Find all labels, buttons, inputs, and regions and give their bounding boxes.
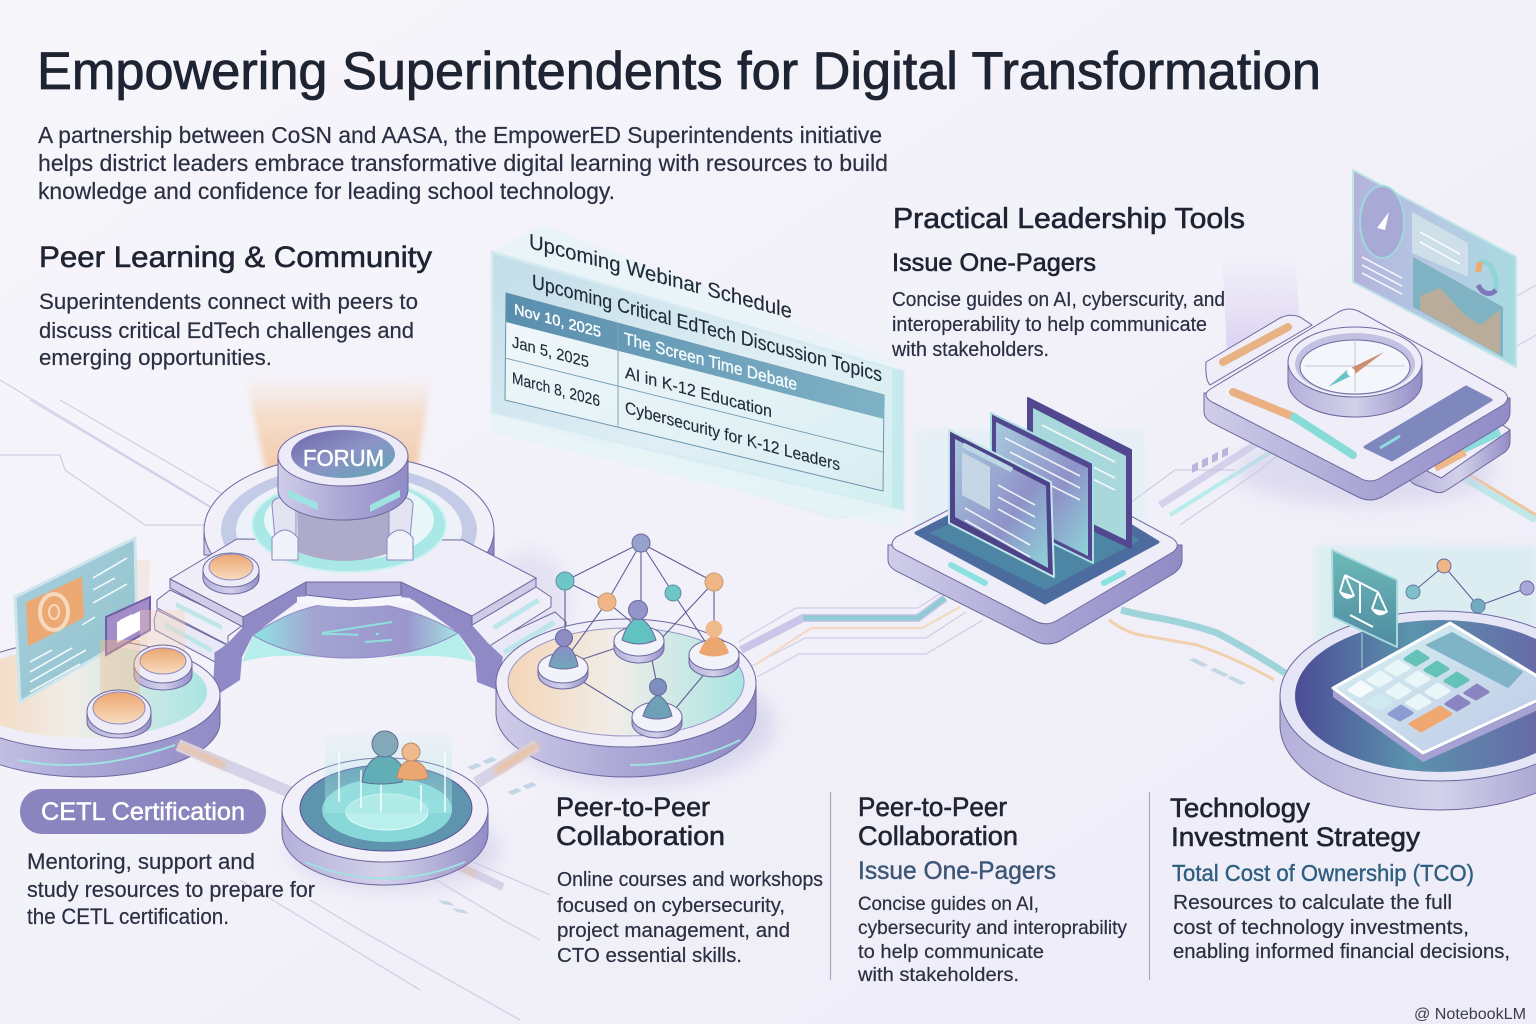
text: CETL description: Mentoring, support and (27, 849, 255, 874)
text: peer learning description: discuss critical EdTech challenges and (39, 318, 414, 343)
row 1 topic: The Screen Time Debate (624, 328, 797, 394)
text: issue one-pagers description: with stakeholders. (891, 339, 1049, 361)
text: peer learning description: Superintendents connect with peers to (39, 289, 418, 314)
heading: Peer-to-Peer (858, 792, 1007, 822)
connector beams (178, 745, 537, 887)
row 3 topic: Cybersecurity for K-12 Leaders (625, 397, 840, 475)
forum label: FORUM (303, 445, 384, 471)
column: peer-to-peer collaboration one-pagers (857, 792, 1127, 986)
text: issue one-pagers description (891, 289, 1225, 361)
text: issue one-pagers description: Concise guides on AI, cyberscurity, and (892, 289, 1225, 311)
illustration: right disc with network (496, 534, 775, 785)
heading: Collaboration (858, 821, 1018, 851)
text: peer learning description (39, 289, 418, 370)
table subheading: Upcoming Critical EdTech Discussion Topics (532, 271, 882, 387)
heading: peer learning and community: Peer Learning & Community (39, 241, 432, 274)
heading: Peer-to-Peer (556, 792, 710, 822)
back tab (1206, 315, 1312, 385)
intro paragraph (38, 122, 888, 204)
body: focused on cybersecurity, (557, 895, 785, 917)
body: enabling informed financial decisions, (1173, 941, 1510, 963)
row 2 date: Jan 5, 2025 (512, 333, 589, 372)
body: CTO essential skills. (557, 945, 742, 967)
row 3 date: March 8, 2026 (512, 369, 600, 411)
person teal (362, 755, 405, 784)
body (857, 893, 1127, 986)
circuit traces and flowing connectors (0, 285, 1536, 1020)
arch (213, 582, 503, 693)
platform steps (154, 587, 566, 668)
person teal head (372, 731, 398, 757)
intro paragraph: helps district leaders embrace transformative digital learning with resources to build (38, 150, 888, 176)
middle tablet (991, 413, 1093, 563)
subheading: Issue One-Pagers (858, 857, 1056, 885)
heading: practical leadership tools: Practical Leadership Tools (893, 203, 1245, 235)
cylinder with label (278, 426, 408, 520)
body: Concise guides on AI, (858, 893, 1039, 915)
pedestal upper (134, 610, 192, 690)
text: issue one-pagers description: interoperability to help communicate (892, 314, 1207, 336)
column: technology investment strategy (1170, 793, 1510, 963)
illustration: forum platform (154, 375, 570, 693)
person pedestal right (689, 620, 739, 677)
body: project management, and (557, 920, 790, 942)
person pedestal centre (614, 600, 664, 663)
title: Empowering Superintendents for Digital Transformation (37, 42, 1321, 101)
platform top (170, 539, 536, 617)
stem (272, 497, 413, 561)
row 1 date: Nov 10, 2025 (514, 301, 601, 341)
badge: CETL certification: CETL Certification (41, 798, 245, 826)
small pedestal (203, 553, 259, 594)
text: CETL description (27, 849, 315, 929)
document card (15, 538, 137, 702)
front tab (1409, 420, 1510, 493)
subheading: Total Cost of Ownership (TCO) (1172, 860, 1474, 886)
network nodes (556, 534, 723, 611)
body: Resources to calculate the full (1173, 892, 1452, 914)
badge: CETL certification (20, 789, 266, 834)
compass dial (1288, 327, 1422, 417)
person orange (397, 760, 428, 780)
divider (1148, 792, 1150, 980)
row 2 topic: AI in K-12 Education (625, 362, 772, 421)
intro paragraph: A partnership between CoSN and AASA, the EmpowerED Superintendents initiative (38, 122, 882, 148)
body: cost of technology investments, (1173, 917, 1469, 939)
illustration: compass device (1204, 170, 1516, 505)
column: peer-to-peer collaboration courses (556, 792, 823, 967)
keys (1349, 651, 1488, 731)
panel: webinar schedule (492, 225, 903, 530)
intro paragraph: knowledge and confidence for leading school technology. (38, 178, 615, 204)
front tablet (949, 430, 1054, 577)
network links (565, 543, 714, 717)
network chart (1406, 559, 1534, 613)
label strip (1365, 387, 1491, 460)
calculator body (1333, 623, 1536, 762)
hub under the arch (242, 602, 475, 662)
body: with stakeholders. (857, 964, 1019, 986)
folder card (106, 597, 150, 655)
body: to help communicate (858, 941, 1044, 963)
illustration: calculator device (1280, 545, 1536, 810)
body (557, 869, 823, 967)
heading: Technology (1170, 793, 1310, 823)
table (505, 293, 884, 491)
scales card (1332, 550, 1397, 668)
person orange head (402, 743, 420, 761)
divider (830, 792, 832, 980)
heading (858, 792, 1018, 851)
illustration: left disc with document card (0, 538, 220, 777)
heading: Investment Strategy (1171, 822, 1421, 852)
body: Online courses and workshops (557, 869, 823, 891)
text: CETL description: study resources to prepare for (27, 877, 315, 902)
base plate (1204, 393, 1510, 500)
heading (556, 792, 725, 851)
pedestal lower (87, 640, 151, 738)
heading: Collaboration (556, 821, 725, 851)
text: peer learning description: emerging opportunities. (39, 345, 272, 370)
text: CETL description: the CETL certification. (27, 904, 229, 929)
person pedestal front (632, 678, 682, 738)
body: cybersecurity and interoprability (858, 917, 1127, 939)
illustration: mentoring disc with people (282, 731, 500, 890)
back tablet (1028, 398, 1131, 548)
heading (1170, 793, 1421, 852)
panel: dashboard (1353, 170, 1516, 367)
subheading: issue one-pagers: Issue One-Pagers (892, 249, 1096, 277)
person pedestal left (538, 630, 588, 689)
illustration: tablets device (888, 398, 1182, 644)
watermark: @ NotebookLM (1414, 1006, 1526, 1023)
table heading: Upcoming Webinar Schedule (529, 229, 792, 323)
body (1173, 892, 1510, 963)
